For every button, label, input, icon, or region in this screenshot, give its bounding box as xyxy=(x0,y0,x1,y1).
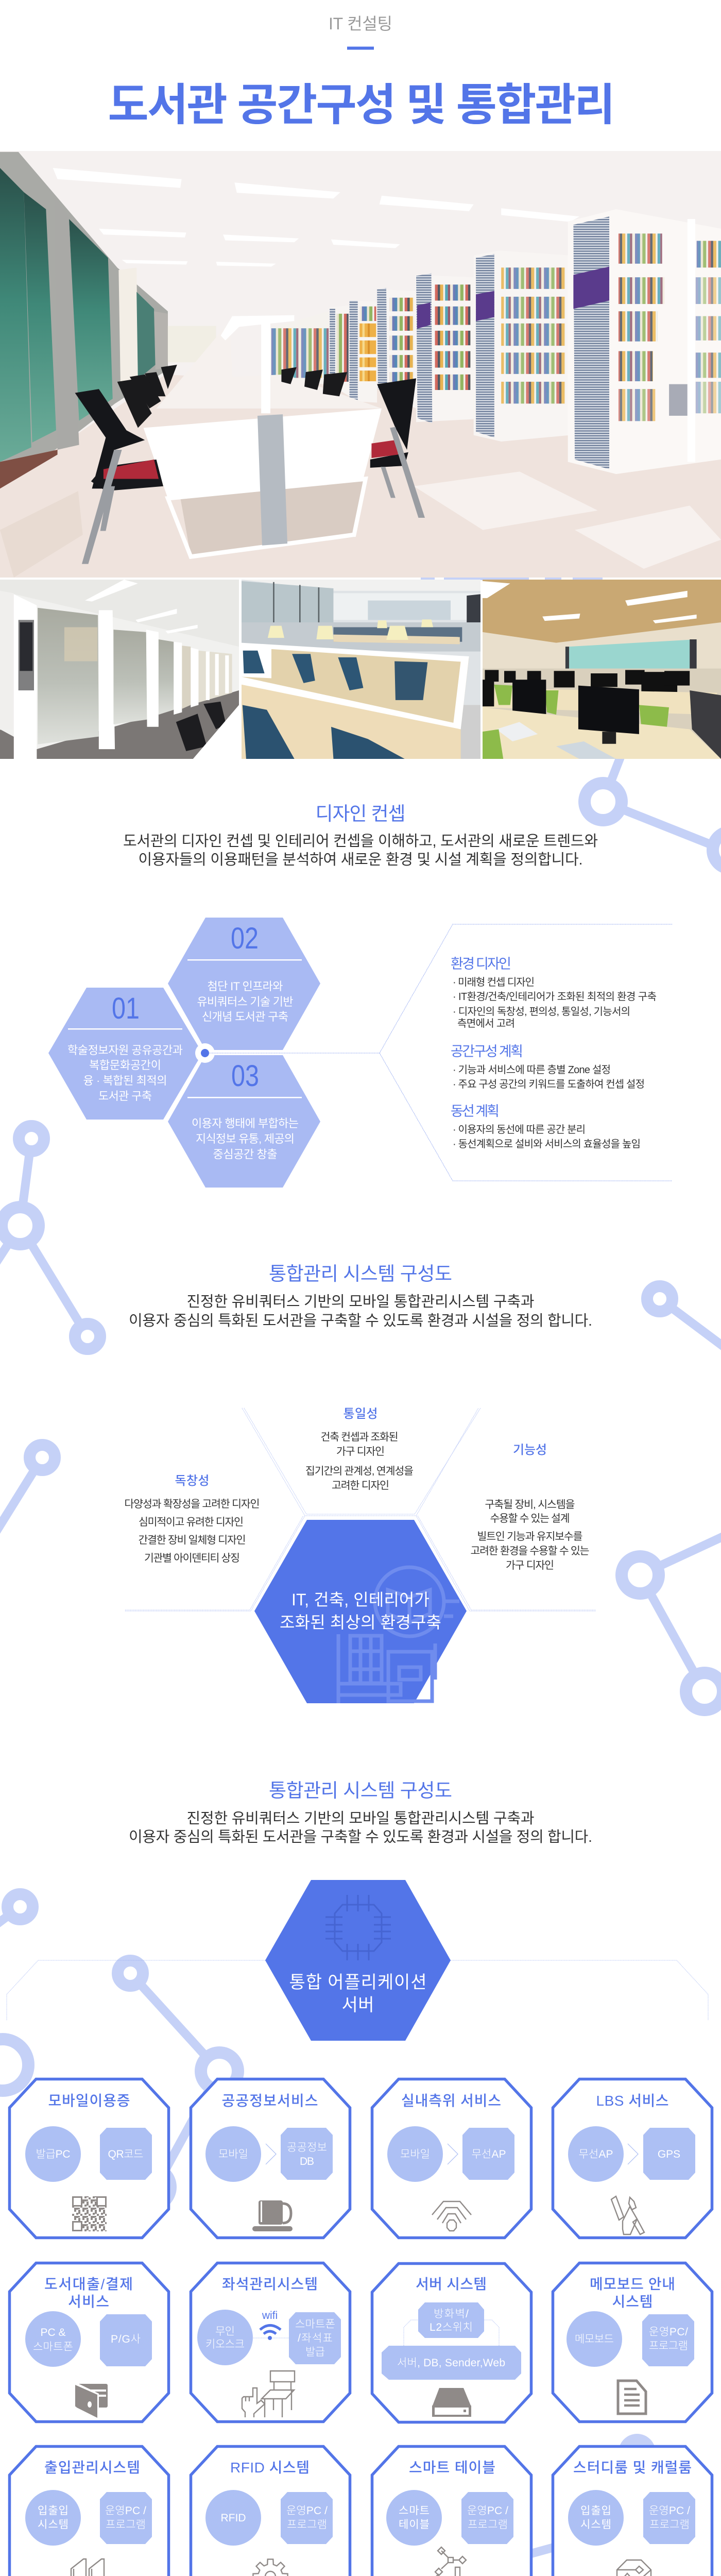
photo: hero library reading room xyxy=(0,151,721,578)
photo: reading desks xyxy=(242,580,480,759)
card: seat management: 발급 xyxy=(305,2346,325,2358)
text: originality: 심미적이고 유려한 디자인 xyxy=(139,1516,244,1528)
card: mobile ID: 발급PC xyxy=(36,2148,70,2160)
description: 진정한 유비쿼터스 기반의 모바일 통합관리시스템 구축과 xyxy=(186,1810,535,1827)
card: memo board system xyxy=(553,2263,712,2421)
icon: chip xyxy=(325,1895,391,1960)
icon: wallet xyxy=(75,2383,108,2418)
card: RFID system: 운영PC / xyxy=(286,2505,328,2517)
card: indoor positioning service xyxy=(372,2079,531,2238)
card: smart table xyxy=(372,2446,531,2576)
card: indoor positioning service: 무선AP xyxy=(472,2148,506,2160)
hexagon 01: 도서관 구축 xyxy=(98,1090,152,1103)
card: public information service: 공공정보 xyxy=(287,2142,327,2154)
card: indoor positioning service: 모바일 xyxy=(400,2148,430,2160)
dotted bracket xyxy=(210,924,672,1053)
connector node xyxy=(195,1043,215,1063)
list: environment design: 측면에서 고려 xyxy=(457,1018,515,1029)
card: RFID system xyxy=(191,2446,350,2576)
card: access control: 입출입 xyxy=(38,2505,68,2517)
card: smart table: 스마트 xyxy=(399,2505,430,2517)
hexagon 03: 중심공간 창출 xyxy=(213,1148,277,1161)
text: originality: 기관별 아이덴티티 상징 xyxy=(144,1552,240,1564)
description xyxy=(123,833,598,868)
list: environment design: · 디자인의 독창성, 편의성, 통일성, 기능서의 xyxy=(453,1006,630,1018)
card: public information service xyxy=(191,2079,350,2238)
card: RFID system: RFID xyxy=(220,2512,246,2524)
hexagon 01: 복합문화공간이 xyxy=(89,1059,161,1072)
text: functionality xyxy=(471,1443,589,1571)
card: mobile ID: 모바일이용증 xyxy=(48,2093,130,2109)
card: LBS service: LBS 서비스 xyxy=(596,2093,668,2109)
text: uniformity: 집기간의 관계성, 연계성을 xyxy=(305,1465,414,1477)
list: space planning: · 주요 구성 공간의 키워드를 도출하여 컨셉 설정 xyxy=(453,1078,645,1090)
card: memo board system: 메모보드 xyxy=(575,2333,614,2345)
text: originality: 간결한 장비 일체형 디자인 xyxy=(138,1534,246,1546)
text: uniformity xyxy=(305,1407,414,1492)
server hexagon: 서버 xyxy=(342,1995,374,2015)
hexagon 01 xyxy=(48,988,202,1120)
section: management system concept xyxy=(125,1263,595,1703)
text: originality xyxy=(125,1474,260,1564)
description: 진정한 유비쿼터스 기반의 모바일 통합관리시스템 구축과 xyxy=(186,1294,535,1310)
text: functionality: 구축될 장비, 시스템을 xyxy=(485,1499,575,1511)
icon: signal xyxy=(432,2201,471,2231)
list: circulation planning: · 동선계획으로 설비와 서비스의 효율성을 높임 xyxy=(453,1138,641,1150)
card: mobile ID xyxy=(9,2079,169,2238)
hexagon 03: 지식정보 유통, 제공의 xyxy=(196,1132,295,1145)
photo: glass study rooms xyxy=(0,580,239,759)
icon: touch nodes xyxy=(435,2547,469,2576)
icon: library book and buildings xyxy=(338,1567,459,1703)
card: loan and payment service: 서비스 xyxy=(68,2294,109,2310)
card: access control: 운영PC / xyxy=(105,2505,146,2517)
hexagon 03: 03 xyxy=(231,1059,259,1093)
icon: satellite xyxy=(611,2196,644,2234)
card: loan and payment service: PC & xyxy=(40,2327,66,2338)
hexagon 01: 01 xyxy=(112,992,140,1025)
server hexagon: 통합 어플리케이션 xyxy=(289,1973,426,1992)
card: seat management xyxy=(191,2263,350,2421)
card: LBS service: 무선AP xyxy=(579,2148,613,2160)
icon: circuit xyxy=(617,2560,651,2576)
card: loan and payment service: 도서대출/결제 xyxy=(44,2276,133,2292)
list: space planning xyxy=(451,1044,645,1090)
title: 도서관 공간구성 및 통합관리 xyxy=(108,80,615,130)
text: functionality: 빌트인 기능과 유지보수를 xyxy=(477,1531,583,1543)
description: 이용자 중심의 특화된 도서관을 구축할 수 있도록 환경과 시설을 정의 합니다. xyxy=(129,1828,592,1845)
hexagon 02: 신개념 도서관 구축 xyxy=(202,1010,288,1023)
card: server system: L2스위치 xyxy=(430,2321,473,2333)
text: uniformity: 통일성 xyxy=(343,1407,378,1421)
card: server system xyxy=(372,2264,531,2422)
card: smart table: 테이블 xyxy=(399,2519,430,2531)
icon: drive xyxy=(432,2388,471,2417)
card: LBS service xyxy=(553,2079,712,2238)
card: memo board system: 운영PC/ xyxy=(649,2326,688,2338)
center hexagon: IT, 건축, 인테리어가 xyxy=(291,1590,430,1609)
card: RFID system: 프로그램 xyxy=(287,2519,327,2531)
card: memo board system: 메모보드 안내 xyxy=(590,2276,675,2292)
hexagon 03: 이용자 행태에 부합하는 xyxy=(192,1117,299,1130)
text: functionality: 가구 디자인 xyxy=(506,1560,554,1571)
card: access control xyxy=(9,2446,169,2576)
card: public information service: 모바일 xyxy=(218,2148,248,2160)
list: space planning: · 기능과 서비스에 따른 층별 Zone 설정 xyxy=(453,1064,611,1076)
hexagon 02: 유비쿼터스 기술 기반 xyxy=(197,995,294,1008)
double dotted frame xyxy=(125,1408,595,1611)
card: memo board system: 시스템 xyxy=(612,2294,653,2310)
card: memo board system: 프로그램 xyxy=(649,2340,688,2352)
description: 도서관의 디자인 컨셉 및 인테리어 컨셉을 이해하고, 도서관의 새로운 트렌드와 xyxy=(123,833,598,850)
card: indoor positioning service: 실내측위 서비스 xyxy=(401,2093,501,2109)
center hexagon xyxy=(254,1520,467,1703)
card: smart table: 스마트 테이블 xyxy=(409,2460,495,2476)
card: seat management: 좌석관리시스템 xyxy=(222,2276,318,2292)
hexagon 01: 융 · 복합된 최적의 xyxy=(83,1074,167,1087)
card: study room: 프로그램 xyxy=(649,2519,690,2531)
hexagon 02: 02 xyxy=(231,922,259,955)
card: LBS service: GPS xyxy=(658,2148,680,2160)
card: smart table: 운영PC / xyxy=(467,2505,508,2517)
icon: QR code xyxy=(72,2196,107,2231)
hexagon 02 xyxy=(168,918,320,1050)
card: seat management: 스마트폰 xyxy=(295,2318,335,2330)
photo: computer lab xyxy=(483,580,721,759)
hexagon 01: 학술정보자원 공유공간과 xyxy=(67,1044,183,1057)
icon: gates xyxy=(71,2559,104,2576)
description xyxy=(129,1810,592,1845)
wifi: wifi xyxy=(262,2310,278,2321)
icon: mug xyxy=(252,2200,293,2231)
text: originality: 독창성 xyxy=(175,1474,209,1488)
card: loan and payment service: P/G사 xyxy=(111,2333,141,2345)
list: space planning: 공간구성 계획 xyxy=(451,1044,523,1059)
list: environment design: · IT환경/건축/인테리어가 조화된 최적의 환경 구축 xyxy=(453,991,657,1003)
dotted branch lines xyxy=(7,1960,708,2020)
text: functionality: 고려한 환경을 수용할 수 있는 xyxy=(471,1545,589,1557)
description: 이용자들의 이용패턴을 분석하여 새로운 환경 및 시설 계획을 정의합니다. xyxy=(138,851,583,868)
text: functionality: 기능성 xyxy=(513,1443,547,1457)
wifi xyxy=(253,2310,289,2340)
server hexagon xyxy=(265,1880,451,2041)
card: access control: 출입관리시스템 xyxy=(44,2460,140,2476)
card: access control: 시스템 xyxy=(38,2519,68,2531)
card: server system: 서버 시스템 xyxy=(416,2276,487,2292)
heading: 통합관리 시스템 구성도 xyxy=(269,1263,452,1284)
list: circulation planning: · 이용자의 동선에 따른 공간 분리 xyxy=(453,1124,586,1136)
hexagon 02: 첨단 IT 인프라와 xyxy=(207,980,283,993)
decorative molecule background xyxy=(0,577,721,2576)
icon: document xyxy=(618,2381,646,2414)
card: study room: 운영PC / xyxy=(649,2505,690,2517)
card: access control: 프로그램 xyxy=(106,2519,146,2531)
card: server system: 방화벽/ xyxy=(434,2308,469,2320)
text: uniformity: 건축 컨셉과 조화된 xyxy=(320,1431,399,1443)
card: seat management: 무인 xyxy=(215,2326,235,2337)
card: public information service: DB xyxy=(300,2156,314,2167)
card: study room: 입출입 xyxy=(580,2505,611,2517)
text: functionality: 수용할 수 있는 설계 xyxy=(490,1513,570,1524)
hexagon 03 xyxy=(168,1055,320,1188)
card: seat management: 키오스크 xyxy=(205,2338,245,2350)
heading: 통합관리 시스템 구성도 xyxy=(269,1780,452,1801)
heading: 디자인 컨셉 xyxy=(315,803,406,824)
accent bar xyxy=(347,46,374,49)
text: uniformity: 고려한 디자인 xyxy=(332,1480,389,1492)
icon: gear xyxy=(253,2559,288,2576)
list: environment design: 환경 디자인 xyxy=(451,956,511,972)
card: loan and payment service: 스마트폰 xyxy=(33,2341,73,2353)
description xyxy=(129,1294,592,1329)
text: originality: 다양성과 확장성을 고려한 디자인 xyxy=(125,1498,260,1510)
category label: IT 컨설팅: IT 컨설팅 xyxy=(329,14,392,33)
list: environment design xyxy=(451,956,657,1029)
list: circulation planning: 동선 계획 xyxy=(451,1104,500,1119)
list: circulation planning xyxy=(451,1104,641,1150)
card: mobile ID: QR코드 xyxy=(108,2148,143,2160)
card: smart table: 프로그램 xyxy=(468,2519,508,2531)
icon: seat and hand xyxy=(242,2371,295,2417)
list: environment design: · 미래형 컨셉 디자인 xyxy=(453,976,535,988)
card: study room: 시스템 xyxy=(580,2519,611,2531)
center hexagon: 조화된 최상의 환경구축 xyxy=(280,1613,441,1632)
section: design concept xyxy=(48,803,672,1188)
text: uniformity: 가구 디자인 xyxy=(336,1446,385,1458)
card: study room xyxy=(553,2446,712,2576)
card: public information service: 공공정보서비스 xyxy=(221,2093,318,2109)
card: RFID system: RFID 시스템 xyxy=(230,2460,310,2476)
description: 이용자 중심의 특화된 도서관을 구축할 수 있도록 환경과 시설을 정의 합니다. xyxy=(129,1312,592,1329)
card: study room: 스터디룸 및 캐럴룸 xyxy=(573,2460,692,2476)
card: seat management: /좌석표 xyxy=(298,2332,333,2344)
section: integrated application server xyxy=(7,1780,712,2576)
card: server system: 서버, DB, Sender,Web xyxy=(397,2357,505,2369)
card: loan and payment service xyxy=(9,2263,169,2421)
